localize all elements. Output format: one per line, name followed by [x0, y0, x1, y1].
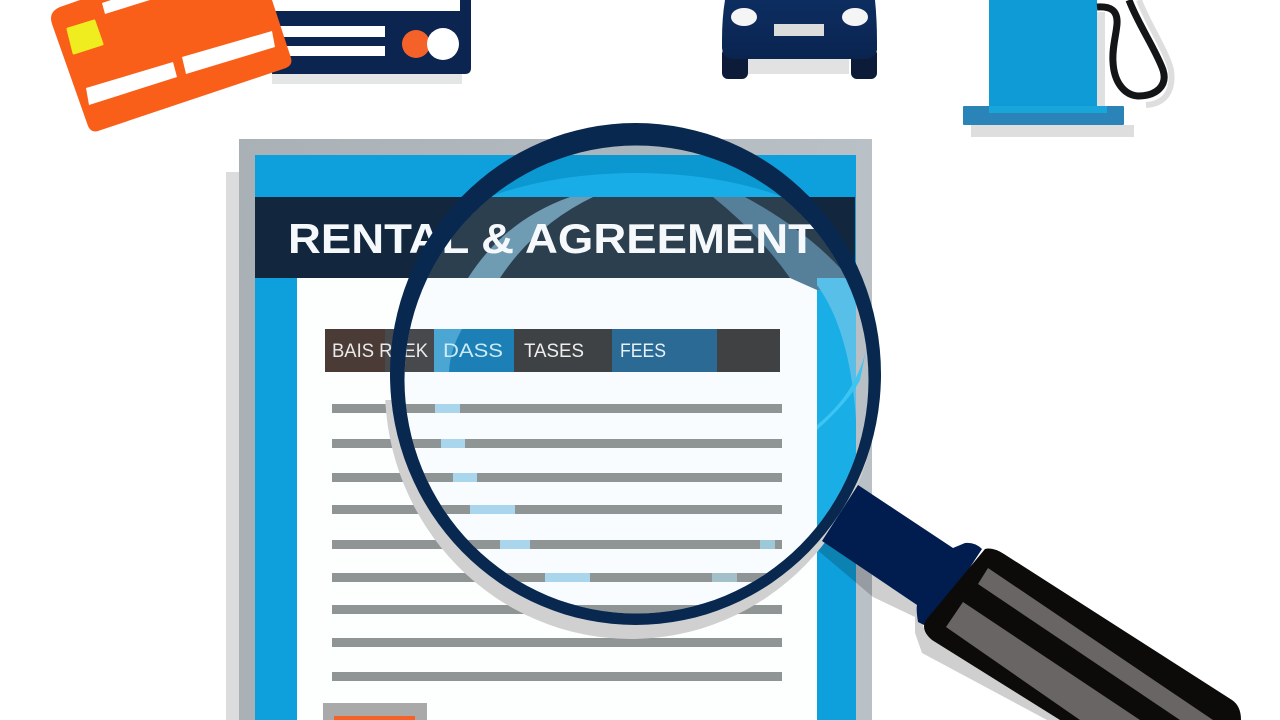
lens glare arc on header	[468, 197, 593, 278]
tab bar: rate, days, taxes, fees	[325, 329, 780, 372]
tab labels: FEES	[620, 341, 666, 362]
document: rental agreement sheet	[226, 139, 872, 720]
document heading: RENTAL & AGREEMENT	[288, 215, 816, 262]
icon: orange credit card	[51, 0, 291, 131]
handle grip	[924, 549, 1241, 720]
document header band	[255, 197, 855, 278]
magnifier lens interior	[404, 146, 868, 614]
magnifier: rim and handle	[390, 123, 1241, 720]
icon: fuel pump	[963, 0, 1172, 137]
lens rim	[390, 123, 881, 625]
icon: car front	[722, 0, 877, 79]
icon: navy payment card	[272, 0, 471, 84]
handle shadow	[815, 541, 1070, 720]
lens rim shadow	[385, 400, 868, 639]
lens glare on blue margin	[817, 278, 856, 420]
document text lines	[332, 404, 782, 681]
tab labels: BAIS RTEK	[332, 341, 428, 362]
lens glare on text lines	[435, 404, 775, 582]
tab labels	[332, 341, 666, 362]
tab labels: TASES	[524, 341, 584, 362]
tab labels: DASS	[443, 341, 503, 362]
white page	[297, 278, 817, 720]
signature button	[323, 703, 427, 720]
handle neck	[822, 485, 982, 628]
lens glare on tab bar	[434, 329, 462, 372]
